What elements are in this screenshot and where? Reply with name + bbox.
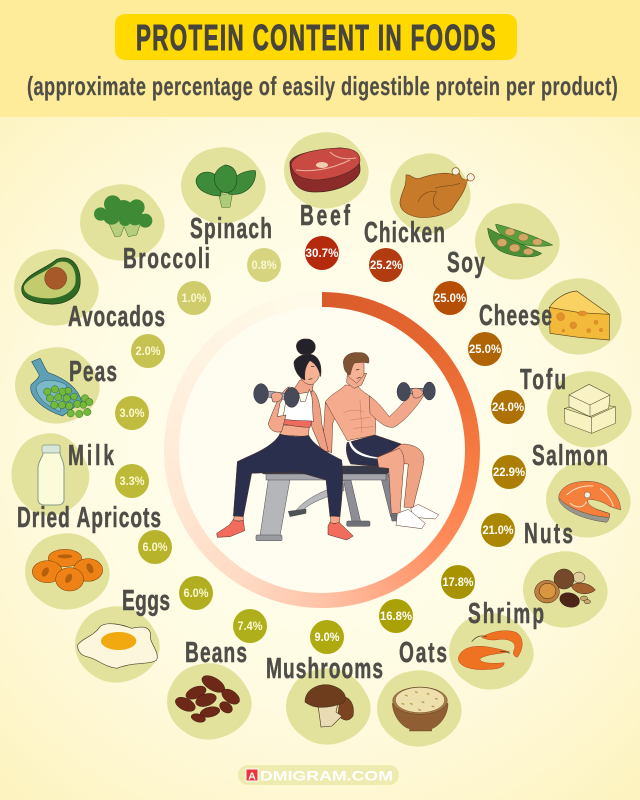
label: dried apricots: Dried Apricots — [17, 502, 161, 534]
subtitle: (approximate percentage of easily digestible protein per product) — [27, 72, 618, 101]
value: avocados — [131, 334, 165, 368]
value: oats — [379, 599, 413, 633]
icon: mixed nuts — [523, 551, 608, 628]
value: beans: 7.4% — [238, 619, 263, 633]
label: oats: Oats — [399, 637, 447, 669]
icon: milk bottle — [11, 433, 89, 516]
icon: roast chicken — [390, 153, 474, 233]
icon: scoop of peas — [15, 347, 100, 424]
watermark: admigram.com — [238, 765, 399, 785]
value: soy: 25.0% — [434, 291, 466, 305]
centre illustration: couple lifting dumbbells on a bench — [217, 339, 439, 541]
title banner: PROTEIN CONTENT IN FOODS — [136, 19, 496, 58]
value: dried apricots: 6.0% — [142, 540, 168, 554]
food: oats — [377, 599, 462, 747]
value: tofu — [491, 390, 525, 424]
watermark: admigram.com: DMIGRAM.COM — [260, 768, 393, 784]
label: shrimp: Shrimp — [468, 598, 544, 630]
label: peas: Peas — [69, 356, 117, 388]
icon: beans — [167, 663, 252, 740]
value: beef: 30.7% — [306, 246, 339, 260]
icon: broccoli — [80, 184, 165, 261]
icon: salmon steak — [546, 461, 631, 538]
label: spinach: Spinach — [190, 213, 272, 245]
label: soy: Soy — [447, 247, 485, 279]
value: cheese: 25.0% — [469, 342, 501, 356]
label: mushrooms: Mushrooms — [266, 653, 383, 685]
food: beef — [284, 132, 369, 270]
food: eggs — [75, 576, 213, 683]
value: oats: 16.8% — [380, 609, 412, 623]
progress ring: protein scale — [164, 292, 480, 608]
icon: soy pods — [475, 203, 560, 280]
food: chicken — [364, 153, 474, 282]
food: spinach — [181, 147, 281, 282]
icon: spinach — [181, 147, 266, 224]
label: broccoli: Broccoli — [123, 243, 210, 275]
food: tofu — [491, 364, 632, 448]
value: peas: 3.0% — [120, 406, 145, 420]
label: eggs: Eggs — [122, 585, 170, 617]
value: milk: 3.3% — [120, 474, 145, 488]
food: mushrooms — [266, 620, 383, 745]
food: avocados — [14, 249, 165, 368]
icon: shrimp — [449, 613, 534, 690]
value: dried apricots — [138, 530, 172, 564]
food: beans — [167, 609, 267, 740]
value: cheese — [468, 332, 502, 366]
man — [323, 353, 439, 529]
label: cheese: Cheese — [479, 300, 552, 332]
label: beans: Beans — [185, 637, 247, 669]
icon: mushrooms — [286, 668, 371, 745]
label: nuts: Nuts — [524, 518, 573, 550]
value: avocados: 2.0% — [136, 344, 161, 358]
food: nuts — [481, 513, 608, 628]
food: salmon — [492, 440, 631, 538]
icon: tofu cubes — [547, 371, 632, 448]
value: shrimp: 17.8% — [442, 575, 474, 589]
food: shrimp — [441, 565, 544, 690]
value: eggs: 6.0% — [184, 586, 209, 600]
value: tofu: 24.0% — [492, 400, 524, 414]
man's dumbbell — [397, 382, 435, 401]
label: chicken: Chicken — [364, 217, 445, 249]
label: avocados: Avocados — [68, 301, 165, 333]
label: beef: Beef — [300, 200, 351, 232]
icon: dried apricots — [25, 533, 110, 610]
food: dried apricots — [17, 502, 172, 610]
food: cheese — [468, 278, 622, 366]
value: broccoli: 1.0% — [182, 291, 207, 305]
bench — [256, 466, 400, 541]
food: peas — [15, 347, 149, 430]
woman — [217, 339, 353, 540]
icon: bowl of oats — [377, 670, 462, 747]
food: milk — [11, 433, 149, 516]
value: chicken: 25.2% — [370, 258, 402, 272]
icon: beef steak — [284, 132, 369, 209]
label: salmon: Salmon — [532, 440, 608, 472]
value: mushrooms: 9.0% — [314, 630, 340, 644]
icon: fried egg — [75, 606, 160, 683]
label: tofu: Tofu — [520, 364, 566, 396]
value: spinach: 0.8% — [252, 258, 277, 272]
icon: avocado half — [14, 249, 99, 326]
food: broccoli — [80, 184, 211, 315]
value: salmon: 22.9% — [493, 465, 525, 479]
icon: cheese wedge — [537, 278, 622, 355]
woman's dumbbell — [254, 384, 299, 407]
food: soy — [433, 203, 560, 315]
watermark: admigram.com: A — [248, 770, 256, 782]
value: nuts: 21.0% — [482, 523, 514, 537]
label: milk: Milk — [68, 440, 114, 472]
